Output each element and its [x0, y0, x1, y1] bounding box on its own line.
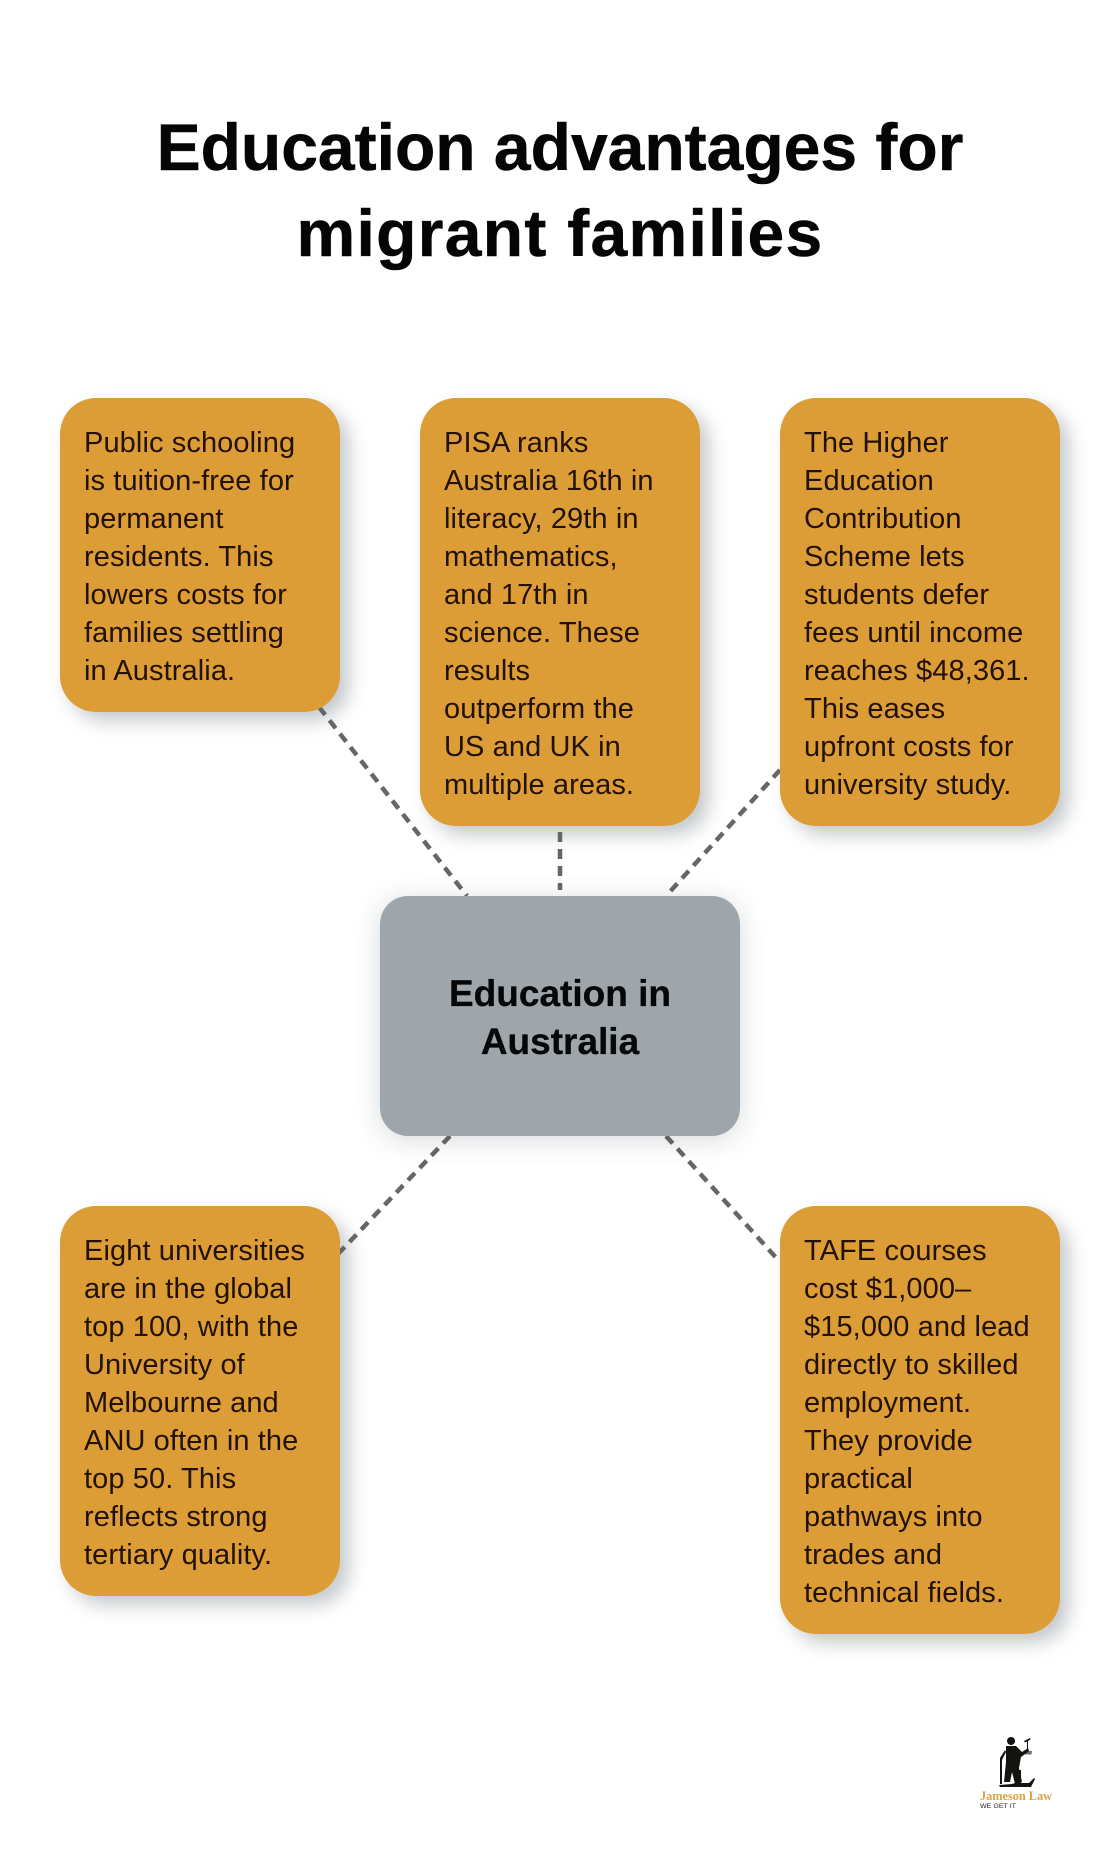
panel: tuition-free public schooling: families settling — [84, 617, 284, 649]
panel: TAFE courses: They provide — [804, 1425, 973, 1457]
panel: TAFE courses: cost $1,000– — [804, 1273, 971, 1305]
panel: central topic: Australia — [481, 1021, 639, 1062]
brand name: Jameson Law — [980, 1789, 1052, 1803]
panel: Higher Education Contribution Scheme: Contribution — [804, 503, 962, 535]
panel: central topic — [380, 896, 740, 1136]
panel: Higher Education Contribution Scheme: Education — [804, 465, 934, 497]
panel: TAFE courses: practical — [804, 1463, 913, 1495]
panel: TAFE courses: technical fields. — [804, 1577, 1004, 1609]
panel: TAFE courses — [780, 1206, 1060, 1634]
panel: PISA rankings: Australia 16th in — [444, 465, 654, 497]
panel: global top universities: Melbourne and — [84, 1387, 279, 1419]
panel: global top universities: ANU often in the — [84, 1425, 298, 1457]
panel: TAFE courses: directly to skilled — [804, 1349, 1019, 1381]
panel: Higher Education Contribution Scheme: The Higher — [804, 427, 948, 459]
panel: PISA rankings: outperform the — [444, 693, 634, 725]
tagline: WE GET IT — [980, 1803, 1016, 1810]
panel: TAFE courses: trades and — [804, 1539, 942, 1571]
panel: global top universities: tertiary quality. — [84, 1539, 272, 1571]
panel: global top universities — [60, 1206, 340, 1596]
logo: Jameson Law — [980, 1737, 1052, 1810]
panel: global top universities: top 100, with the — [84, 1311, 299, 1343]
panel: central topic: Education in — [449, 973, 671, 1014]
panel: tuition-free public schooling: Public schooling — [84, 427, 295, 459]
panel: PISA rankings: and 17th in — [444, 579, 589, 611]
panel: TAFE courses: $15,000 and lead — [804, 1311, 1030, 1343]
panel: global top universities: are in the global — [84, 1273, 292, 1305]
panel: TAFE courses: TAFE courses — [804, 1235, 987, 1267]
panel: tuition-free public schooling: is tuition-free for — [84, 465, 294, 497]
panel: Higher Education Contribution Scheme: university study. — [804, 769, 1011, 801]
panel: PISA rankings: multiple areas. — [444, 769, 634, 801]
panel: PISA rankings: mathematics, — [444, 541, 618, 573]
panel: Higher Education Contribution Scheme: students defer — [804, 579, 989, 611]
panel: Higher Education Contribution Scheme: fees until income — [804, 617, 1023, 649]
panel: PISA rankings: literacy, 29th in — [444, 503, 639, 535]
panel: tuition-free public schooling — [60, 398, 340, 712]
panel: global top universities: Eight universities — [84, 1235, 305, 1267]
panel: global top universities: reflects strong — [84, 1501, 268, 1533]
icon: lady justice figure — [999, 1737, 1035, 1787]
panel: global top universities: top 50. This — [84, 1463, 236, 1495]
panel: global top universities: University of — [84, 1349, 245, 1381]
panel: PISA rankings: US and UK in — [444, 731, 621, 763]
title — [157, 110, 963, 270]
panel: TAFE courses: pathways into — [804, 1501, 983, 1533]
panel: tuition-free public schooling: in Australia. — [84, 655, 235, 687]
panel: tuition-free public schooling: residents. This — [84, 541, 274, 573]
panel: TAFE courses: employment. — [804, 1387, 971, 1419]
panel: Higher Education Contribution Scheme: This eases — [804, 693, 945, 725]
panel: Higher Education Contribution Scheme: reaches $48,361. — [804, 655, 1030, 687]
panel: PISA rankings — [420, 398, 700, 826]
panel: Higher Education Contribution Scheme — [780, 398, 1060, 826]
panel: Higher Education Contribution Scheme: Scheme lets — [804, 541, 965, 573]
title: Education advantages for — [157, 110, 963, 184]
panel: PISA rankings: science. These — [444, 617, 640, 649]
panel: Higher Education Contribution Scheme: upfront costs for — [804, 731, 1014, 763]
panel: tuition-free public schooling: lowers costs for — [84, 579, 287, 611]
title: migrant families — [297, 196, 823, 270]
panel: PISA rankings: PISA ranks — [444, 427, 588, 459]
panel: tuition-free public schooling: permanent — [84, 503, 224, 535]
panel: PISA rankings: results — [444, 655, 530, 687]
